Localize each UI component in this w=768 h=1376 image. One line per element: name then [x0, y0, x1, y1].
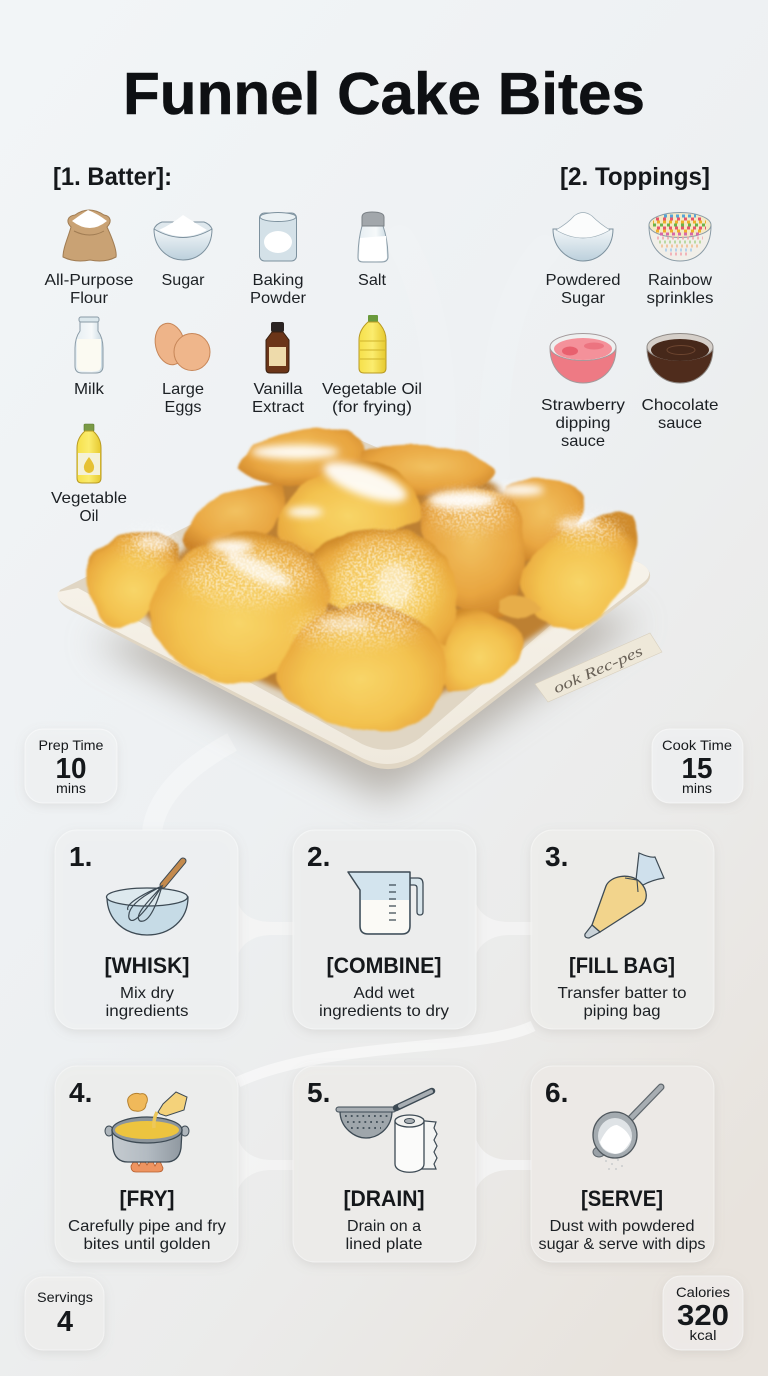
ingredient: vegetable oil for frying [322, 315, 422, 416]
badge: calories [663, 1276, 743, 1350]
step 1: whisk [55, 830, 238, 1029]
step 4: fry: [FRY] [120, 1186, 174, 1211]
topping: strawberry sauce: Strawberry [541, 397, 625, 414]
badge: calories: 320 [677, 1300, 729, 1332]
step 2: combine: 2. [307, 841, 330, 872]
badge: cook time: 15 [682, 753, 712, 785]
step 6: serve: Dust with powdered [550, 1218, 694, 1235]
heading: toppings: [2. Toppings] [560, 163, 710, 191]
ingredient: milk: Milk [74, 381, 105, 398]
plate shadow [90, 600, 640, 800]
step 2: combine: Add wet [354, 985, 415, 1002]
recipe tag: ook Rec-pes [551, 643, 646, 697]
heading: batter: [1. Batter]: [53, 163, 172, 191]
food shadow base [130, 465, 600, 720]
step 3: fill bag: piping bag [584, 1003, 660, 1020]
plate [57, 440, 650, 769]
topping: chocolate sauce: sauce [658, 415, 702, 432]
icon: piping bag [585, 853, 664, 938]
topping: rainbow sprinkles [646, 212, 714, 307]
icon: whisk and bowl [106, 861, 188, 935]
topping: strawberry sauce: dipping [556, 415, 610, 432]
badge: prep time: mins [56, 780, 86, 796]
badge: servings [25, 1277, 104, 1350]
topping: strawberry sauce [541, 334, 625, 450]
title: Funnel Cake Bites [123, 61, 645, 127]
step 6: serve [531, 1066, 714, 1262]
ingredient: salt [358, 212, 388, 289]
bites [88, 428, 638, 731]
badge: prep time: 10 [56, 753, 86, 785]
ingredient: sugar: Sugar [162, 272, 205, 289]
step connectors [236, 895, 533, 1197]
ingredient: flour [44, 210, 134, 307]
step 2: combine: [COMBINE] [326, 953, 442, 978]
ingredient: salt: Salt [358, 272, 387, 289]
step 5: drain: Drain on a [347, 1218, 421, 1235]
connector ribbons [152, 240, 545, 1082]
ingredient: vanilla extract [252, 322, 305, 416]
step 5: drain: lined plate [346, 1236, 423, 1253]
ingredient: flour: Flour [70, 290, 109, 307]
ingredient: sugar [154, 215, 212, 289]
ingredient: large eggs [151, 320, 210, 416]
recipe tag [535, 633, 662, 702]
badge: calories: Calories [676, 1284, 730, 1300]
panel: batter ingredients [44, 210, 422, 525]
ingredient: vegetable oil [51, 424, 127, 525]
badge: servings: 4 [57, 1306, 73, 1338]
topping: rainbow sprinkles: Rainbow [648, 272, 712, 289]
step 3: fill bag: Transfer batter to [558, 985, 687, 1002]
topping: powdered sugar: Powdered [546, 272, 620, 289]
step 6: serve: sugar & serve with dips [538, 1236, 706, 1253]
ingredient: baking powder [250, 212, 307, 307]
powdered sugar [124, 445, 622, 644]
badge: calories: kcal [690, 1327, 716, 1343]
ingredient: large eggs: Eggs [164, 399, 202, 416]
step 5: drain: [DRAIN] [344, 1186, 424, 1211]
step 4: fry: bites until golden [84, 1236, 210, 1253]
step 4: fry: 4. [69, 1077, 92, 1108]
topping: powdered sugar: Sugar [561, 290, 606, 307]
step 3: fill bag: [FILL BAG] [569, 953, 675, 978]
ingredient: vegetable oil for frying: (for frying) [332, 399, 412, 416]
ingredient: baking powder: Baking [252, 272, 304, 289]
ingredient: vanilla extract: Vanilla [254, 381, 303, 398]
step 5: drain: 5. [307, 1077, 330, 1108]
step 4: fry [55, 1066, 238, 1262]
badge: servings: Servings [37, 1289, 93, 1305]
badge: prep time: Prep Time [38, 737, 104, 753]
icon: strainer and paper towel [336, 1091, 437, 1172]
ingredient: vegetable oil: Oil [80, 508, 98, 525]
ingredient: vegetable oil: Vegetable [51, 490, 127, 507]
badge: cook time: Cook Time [662, 737, 732, 753]
icon: frying pot [105, 1092, 189, 1172]
step 1: whisk: Mix dry [120, 985, 174, 1002]
step 2: combine: ingredients to dry [319, 1003, 449, 1020]
step 1: whisk: 1. [69, 841, 92, 872]
step 6: serve: 6. [545, 1077, 568, 1108]
ingredient: flour: All-Purpose [44, 272, 134, 289]
icon: measuring jug [348, 872, 423, 934]
topping: powdered sugar [546, 212, 620, 307]
ingredient: milk [74, 317, 105, 398]
step 2: combine [293, 830, 476, 1029]
topping: rainbow sprinkles: sprinkles [646, 290, 714, 307]
step 1: whisk: [WHISK] [104, 953, 190, 978]
step 4: fry: Carefully pipe and fry [68, 1218, 226, 1235]
ingredient: vanilla extract: Extract [252, 399, 305, 416]
topping: chocolate sauce: Chocolate [642, 397, 719, 414]
badge: prep time [25, 729, 117, 803]
step 1: whisk: ingredients [106, 1003, 188, 1020]
badge: cook time: mins [682, 780, 712, 796]
topping: chocolate sauce [642, 334, 719, 432]
ingredient: vegetable oil for frying: Vegetable Oil [322, 381, 422, 398]
step 6: serve: [SERVE] [581, 1186, 663, 1211]
step 3: fill bag: 3. [545, 841, 568, 872]
ingredient: baking powder: Powder [250, 290, 307, 307]
panel: toppings [541, 212, 719, 450]
step 3: fill bag [531, 830, 714, 1029]
hero: plate of funnel cake bites [57, 428, 662, 800]
icon: sugar sieve [593, 1087, 661, 1170]
step 5: drain [293, 1066, 476, 1262]
ingredient: large eggs: Large [162, 381, 204, 398]
topping: strawberry sauce: sauce [561, 433, 605, 450]
badge: cook time [652, 729, 743, 803]
